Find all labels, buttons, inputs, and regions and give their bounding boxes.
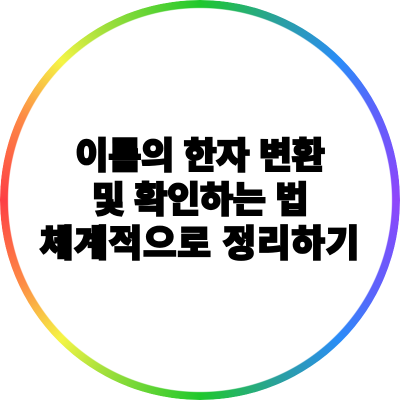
title: 체계적으로 정리하기 <box>40 223 360 264</box>
title: 및 확인하는 법 <box>92 179 308 220</box>
title <box>39 135 360 264</box>
title: 이름의 한자 변환 <box>75 135 325 176</box>
